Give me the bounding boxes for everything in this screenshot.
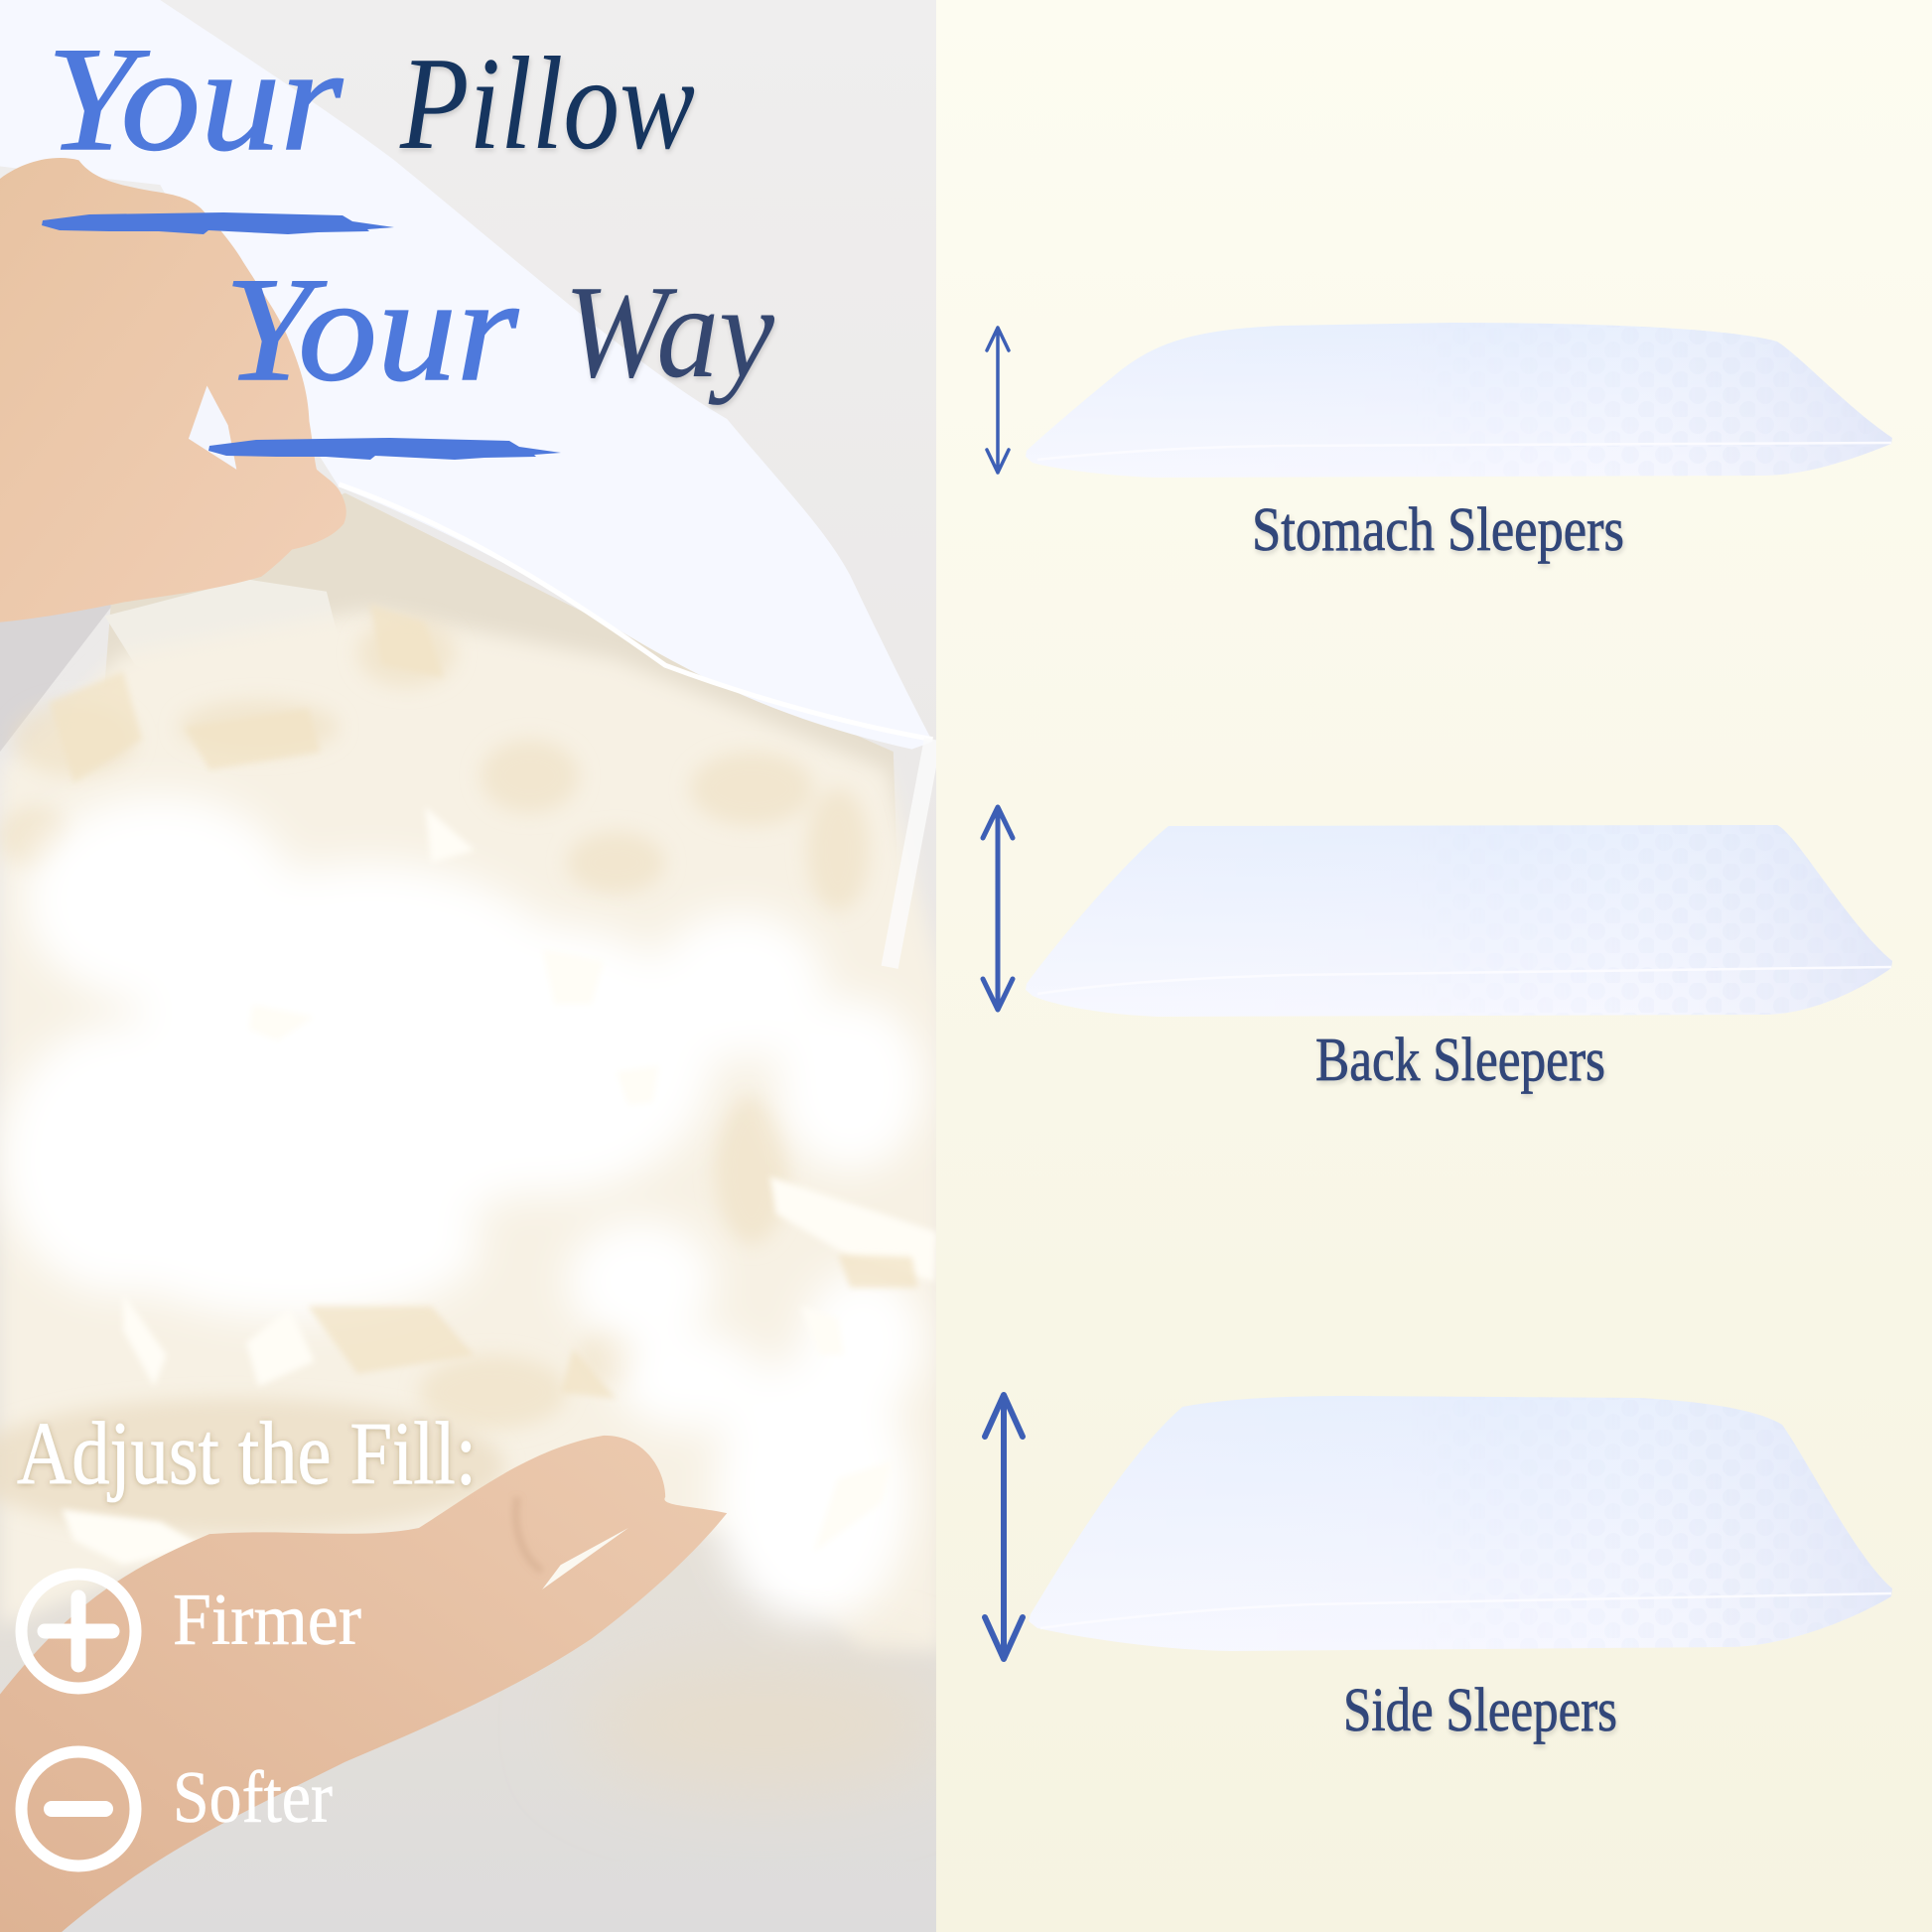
- arrow: back pillow height: [983, 807, 1013, 1010]
- panel: cream right background: [936, 0, 1932, 1932]
- arrow: stomach pillow height: [987, 328, 1009, 473]
- title: Your Pillow Your Way: [42, 17, 774, 460]
- arrow: side pillow height: [985, 1395, 1023, 1659]
- label: Softer: Softer: [173, 1757, 333, 1839]
- title word: Pillow: Pillow: [399, 30, 695, 177]
- label: Stomach Sleepers: Stomach Sleepers: [1252, 496, 1624, 564]
- gap between fingers: [189, 385, 236, 470]
- panel: pillow fill photo scene: [0, 0, 949, 1932]
- label: Back Sleepers: Back Sleepers: [1315, 1027, 1605, 1094]
- label: Firmer: Firmer: [173, 1580, 361, 1661]
- pillow: side sleepers (high loft): [1029, 1396, 1892, 1651]
- fill shade behind heading: [0, 1399, 505, 1534]
- icon: minus in circle: [22, 1751, 135, 1866]
- pillow: stomach sleepers (low loft): [1026, 323, 1892, 478]
- lower hand: [0, 1436, 727, 1932]
- icon: plus in circle: [22, 1575, 135, 1688]
- title word: Your (first line): Your: [47, 17, 344, 182]
- brush underline one: [42, 212, 394, 234]
- pillow: back sleepers (medium loft): [1026, 825, 1892, 1017]
- title word: Your (second line): Your: [224, 247, 519, 412]
- upper hand: [0, 158, 346, 622]
- label: Side Sleepers: Side Sleepers: [1343, 1677, 1617, 1744]
- brush underline two: [208, 438, 561, 460]
- pillow cover fabric: [0, 0, 933, 750]
- title word: Way: Way: [564, 258, 774, 405]
- heading: Adjust the Fill: Adjust the Fill:: [17, 1405, 477, 1503]
